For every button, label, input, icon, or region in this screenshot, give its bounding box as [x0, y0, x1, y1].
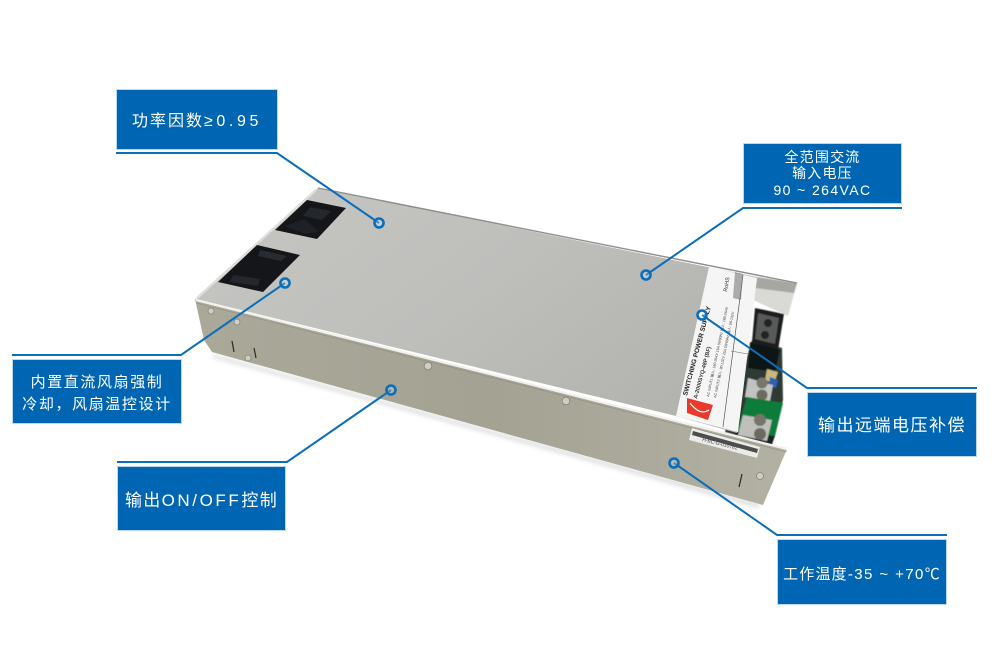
- marker dots: [280, 218, 706, 468]
- fan window 2: [218, 245, 300, 292]
- spec label: RoHS: [723, 277, 732, 292]
- callout: remote voltage compensation: 输出远端电压补偿: [818, 416, 966, 435]
- fan window 1: [275, 200, 346, 239]
- ground shadow: [212, 354, 760, 508]
- callout: power factor: 功率因数≥0.95: [132, 112, 262, 130]
- top cover: [196, 188, 757, 433]
- spec label: AC INPUT1 输入: 180-264V 15A 50/60Hz 输入: 180-264V: [705, 306, 729, 397]
- top back edge highlight: [318, 188, 797, 283]
- callout: remote voltage compensation: [807, 392, 977, 457]
- dark connector: [748, 342, 780, 372]
- spec label: [676, 267, 757, 432]
- callout: fan cooling: 冷却，风扇温控设计: [22, 396, 172, 412]
- spec label: AC INPUT2 输入: 90-132V 25A 50/60Hz 输入: 90-132V: [712, 311, 735, 398]
- callout line: temperature: [674, 463, 947, 535]
- pcb backing: [725, 340, 783, 445]
- barcode sticker: H-BC-G-010762: [702, 437, 738, 452]
- fuse holder: [752, 308, 784, 350]
- upper terminal: [745, 378, 773, 401]
- callout: temperature: 工作温度-35 ~ +70℃: [783, 566, 941, 583]
- spec label: SWITCHING POWER SUPPLY: [682, 305, 713, 397]
- spec label: A-2000SYQ-48P (BF): [693, 346, 713, 400]
- callout line: input voltage: [646, 208, 902, 275]
- callout line: fan cooling: [12, 283, 285, 355]
- barcode sticker: [689, 428, 760, 458]
- callout: input voltage: 90 ~ 264VAC: [773, 182, 872, 198]
- lower terminal: [738, 415, 772, 441]
- callout: power factor: [116, 89, 278, 150]
- rear wall: [753, 277, 797, 316]
- callout: on/off control: [117, 466, 286, 531]
- terminal compartment: [725, 277, 797, 445]
- callout line: remote sense: [702, 315, 977, 388]
- callout: fan cooling: 内置直流风扇强制: [31, 374, 163, 390]
- callout: fan cooling: [12, 359, 182, 424]
- green board: [737, 397, 783, 436]
- screws and slots: [208, 308, 764, 480]
- brand logo: [687, 398, 713, 420]
- callout line: power factor: [116, 153, 379, 223]
- power supply unit: [195, 188, 797, 508]
- callout lines and markers: [12, 153, 977, 535]
- callout line: on/off: [117, 390, 391, 462]
- callout: temperature: [777, 539, 947, 605]
- callout: on/off control: 输出ON/OFF控制: [125, 491, 278, 510]
- front side panel: [195, 299, 787, 505]
- callout: input voltage: 输入电压: [792, 165, 853, 181]
- callout: input voltage: 全范围交流: [784, 149, 860, 165]
- callout: input voltage: [743, 143, 902, 204]
